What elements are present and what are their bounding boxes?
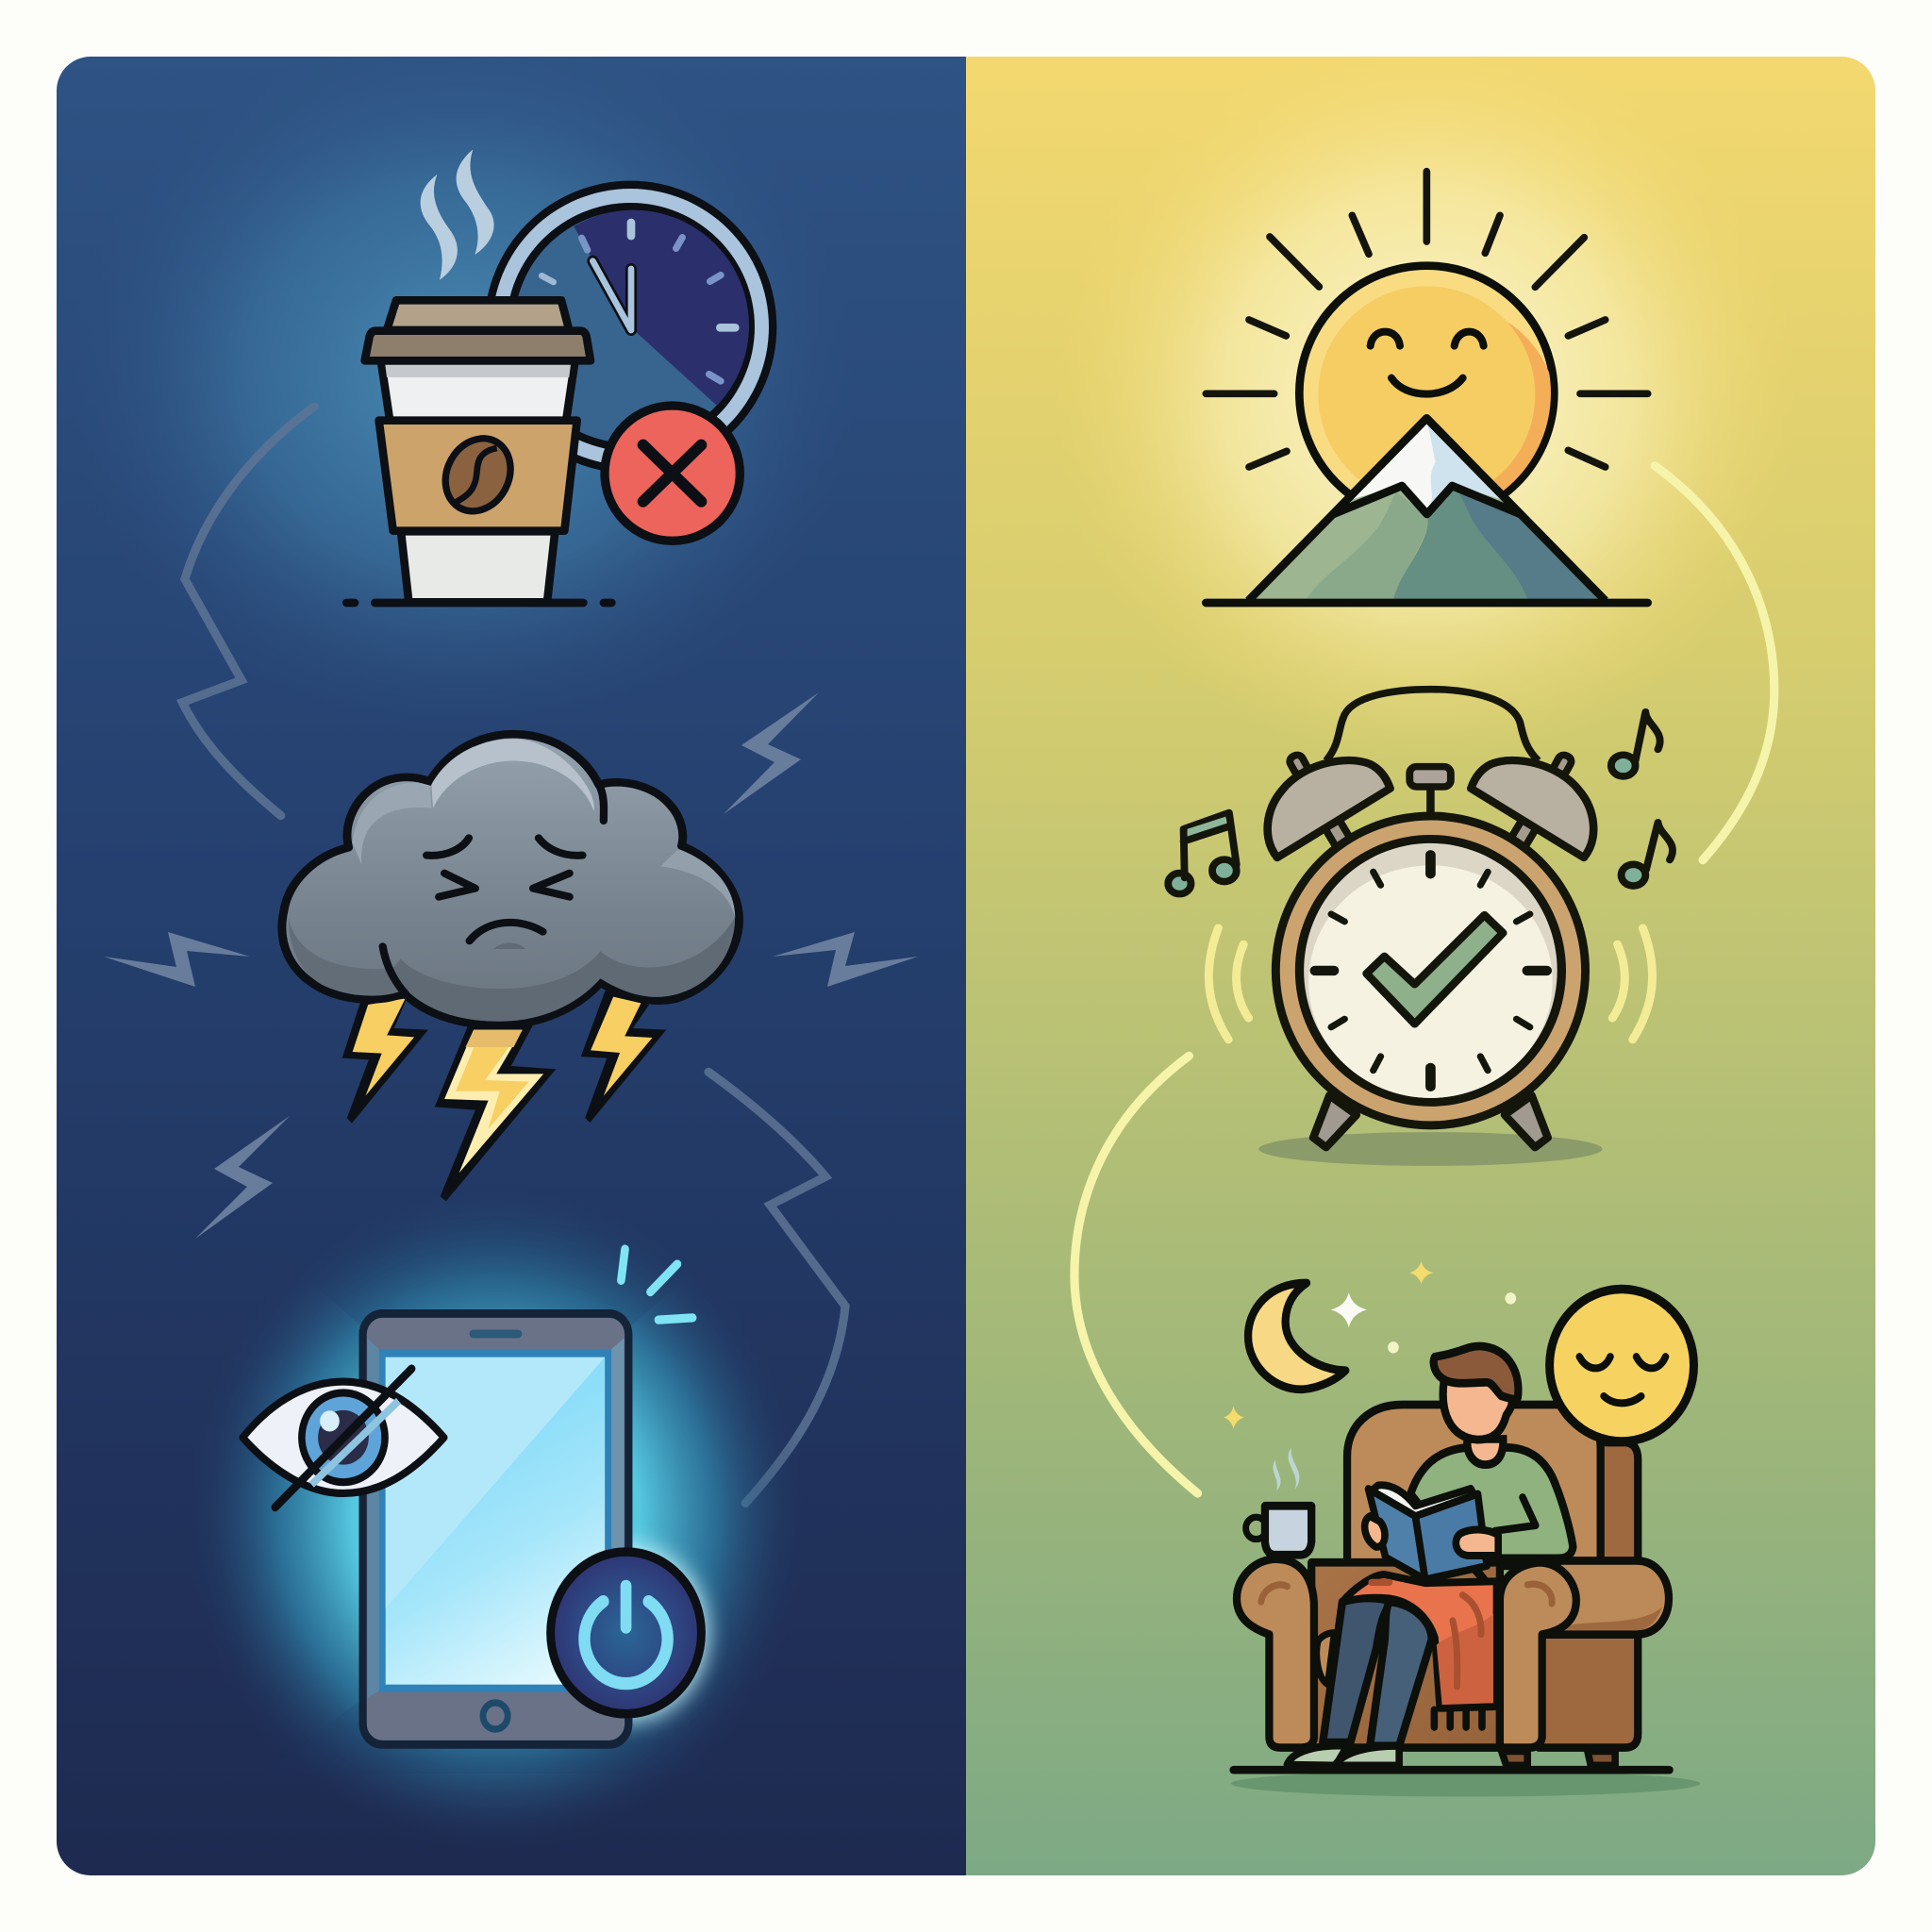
- cloud crease lines: [383, 785, 604, 993]
- music notes: [1168, 712, 1673, 894]
- right arm: [1542, 1560, 1669, 1635]
- clock legs: [1313, 1095, 1548, 1147]
- clock handle: [1326, 690, 1539, 760]
- phone screen: [386, 1357, 605, 1685]
- vibration arcs: [1208, 928, 1653, 1040]
- phone speaker: [470, 1329, 522, 1338]
- clock shadow: [1258, 1132, 1603, 1166]
- snooze button: [1409, 767, 1451, 814]
- cloud sad face: [426, 838, 582, 949]
- icon: crossed out eye: [242, 1369, 444, 1507]
- icon: cup upper body: [381, 361, 575, 422]
- stars and dots: [1224, 1261, 1516, 1428]
- icon: red cross badge: [605, 406, 740, 541]
- arm detail: [1495, 1497, 1536, 1531]
- cloud body: [282, 734, 739, 1025]
- sun face: [1371, 332, 1484, 394]
- panel: right morning side: [966, 24, 1875, 1875]
- icon: cup lower body: [401, 531, 555, 602]
- bell knobs and posts: [1288, 753, 1574, 848]
- ground dashes: [346, 591, 611, 615]
- ground shadow: [1231, 1771, 1700, 1797]
- chair seat lower: [1311, 1562, 1638, 1748]
- open book: [1368, 1485, 1487, 1579]
- left arm cushion: [1317, 1633, 1334, 1684]
- cloud highlights and shadow: [289, 739, 735, 1022]
- icon: alarm clock with check: [1168, 690, 1673, 1166]
- icon: clock: [484, 181, 776, 474]
- icon: storm cloud with lightning: [282, 734, 739, 1201]
- clock body: [1272, 812, 1590, 1129]
- icon: coffee cup with clock: [346, 149, 776, 603]
- trouser legs: [1323, 1598, 1432, 1746]
- neck: [1467, 1439, 1503, 1465]
- icon: lightning bolts: [342, 991, 666, 1201]
- icon: cup sleeve with bean: [379, 421, 577, 531]
- blanket: [1342, 1574, 1496, 1727]
- torso: [1410, 1447, 1573, 1583]
- icon: person reading in armchair: [1224, 1261, 1700, 1797]
- icon: steam: [421, 149, 494, 280]
- right curved arrows: [1074, 466, 1774, 1493]
- sun rays: [1206, 172, 1648, 467]
- mountain: [1248, 418, 1606, 601]
- icon: smiling sun over mountain: [1206, 172, 1648, 603]
- icon: glowing phone: [184, 1181, 808, 1851]
- icon: crescent moon: [1248, 1283, 1345, 1390]
- icon: cup lid: [365, 300, 591, 360]
- sun disc: [1299, 266, 1557, 521]
- head and hair: [1434, 1346, 1518, 1440]
- small background lightning bolts: [104, 692, 918, 1239]
- phone glow: [184, 1181, 808, 1851]
- clock bells: [1268, 760, 1593, 858]
- hands: [1365, 1516, 1498, 1556]
- panel: left night side: [57, 19, 966, 1875]
- phone body: [363, 1313, 628, 1744]
- mug with steam: [1246, 1447, 1311, 1555]
- floor line: [1234, 1758, 1670, 1781]
- slippers: [1287, 1745, 1399, 1765]
- icon: sleeping face: [1550, 1290, 1693, 1441]
- front arms of chair: [1237, 1559, 1576, 1748]
- chair legs: [1502, 1751, 1615, 1765]
- clock ticks: [1315, 855, 1547, 1087]
- left jagged arc arrows: [182, 407, 845, 1503]
- green check mark: [1367, 915, 1503, 1024]
- phone home button: [483, 1703, 508, 1729]
- ground line: [1206, 591, 1648, 615]
- chair back: [1347, 1405, 1638, 1566]
- icon: power button: [551, 1552, 701, 1714]
- phone signal dashes: [621, 1249, 692, 1320]
